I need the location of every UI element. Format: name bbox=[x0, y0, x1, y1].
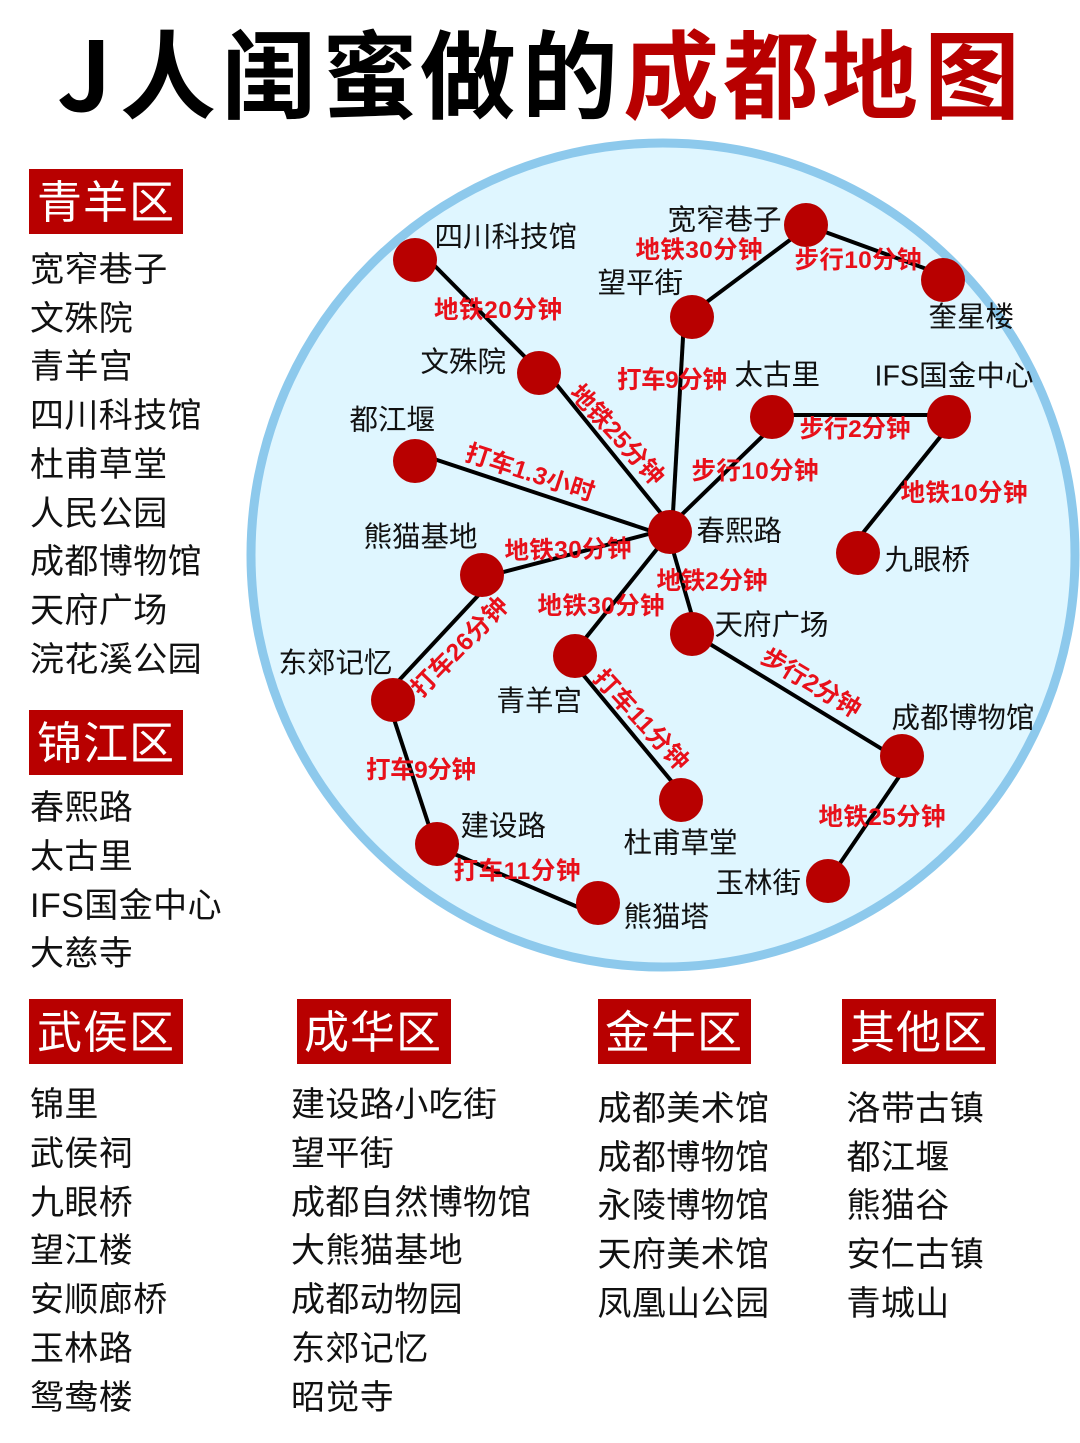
title: 成都地图 bbox=[623, 0, 1020, 139]
panel: 武侯区 list: 武侯祠 bbox=[30, 1135, 133, 1173]
panel: route map bbox=[251, 143, 1075, 967]
panel: 青羊区 list: 文殊院 bbox=[30, 300, 133, 338]
stop name labels: 熊猫塔 bbox=[624, 902, 709, 934]
stop name labels: 成都博物馆 bbox=[892, 703, 1034, 735]
travel time labels: 步行10分钟 bbox=[794, 246, 922, 274]
panel: 成华区 list: 昭觉寺 bbox=[291, 1379, 394, 1417]
panel: 武侯区 list: 九眼桥 bbox=[30, 1184, 133, 1222]
panel: 锦江区 list: 太古里 bbox=[30, 838, 133, 876]
stop name labels: 春熙路 bbox=[696, 516, 782, 548]
travel time labels: 打车26分钟 bbox=[406, 592, 514, 702]
stop name labels: 熊猫基地 bbox=[364, 522, 478, 554]
stop name labels: IFS国金中心 bbox=[874, 361, 1034, 393]
panel: 锦江区 list: 春熙路 bbox=[30, 789, 133, 827]
travel time labels: 打车11分钟 bbox=[454, 857, 580, 885]
panel: 其他区 list: 都江堰 bbox=[846, 1139, 950, 1177]
panel: 金牛区 list: 天府美术馆 bbox=[598, 1236, 770, 1274]
travel time labels: 打车9分钟 bbox=[366, 756, 476, 784]
panel: 锦江区 list: 锦江区 bbox=[37, 718, 175, 769]
stop name labels: 都江堰 bbox=[350, 405, 435, 437]
panel: 青羊区 list: 成都博物馆 bbox=[30, 543, 202, 581]
travel time labels: 地铁10分钟 bbox=[900, 479, 1028, 507]
panel: 青羊区 list: 浣花溪公园 bbox=[30, 641, 202, 679]
travel time labels bbox=[366, 236, 1028, 885]
stop name labels: 九眼桥 bbox=[884, 545, 970, 577]
panel: 武侯区 list: 鸳鸯楼 bbox=[30, 1379, 133, 1417]
panel: 金牛区 list: 成都美术馆 bbox=[598, 1090, 770, 1128]
panel: 青羊区 list: 天府广场 bbox=[30, 592, 168, 630]
stop name labels: 文殊院 bbox=[420, 347, 506, 379]
travel time labels: 步行10分钟 bbox=[692, 457, 818, 485]
panel: 锦江区 list: 大慈寺 bbox=[30, 935, 133, 973]
travel time labels: 地铁25分钟 bbox=[818, 803, 946, 831]
panel: 成华区 list: 成都动物园 bbox=[291, 1281, 463, 1319]
travel time labels: 打车1.3小时 bbox=[462, 439, 598, 507]
stop name labels bbox=[278, 205, 1034, 934]
panel: 其他区 list: 洛带古镇 bbox=[846, 1090, 984, 1128]
travel time labels: 地铁25分钟 bbox=[564, 379, 670, 491]
travel time labels: 打车9分钟 bbox=[617, 366, 727, 394]
panel: 金牛区 list: 永陵博物馆 bbox=[598, 1187, 770, 1225]
panel: 青羊区 list: 人民公园 bbox=[30, 495, 168, 533]
travel time labels: 地铁20分钟 bbox=[434, 296, 562, 324]
stop name labels: 奎星楼 bbox=[928, 302, 1014, 334]
panel: 青羊区 list: 杜甫草堂 bbox=[30, 446, 168, 484]
panel: 武侯区 list: 锦里 bbox=[30, 1086, 99, 1124]
panel: 锦江区 list: IFS国金中心 bbox=[30, 887, 222, 925]
panel: 青羊区 list: 四川科技馆 bbox=[30, 397, 202, 435]
panel: 青羊区 list: 青羊区 bbox=[37, 177, 175, 228]
travel time labels: 地铁30分钟 bbox=[504, 535, 632, 565]
travel time labels: 步行2分钟 bbox=[756, 642, 866, 724]
stop name labels: 青羊宫 bbox=[496, 686, 582, 718]
panel: 金牛区 list: 金牛区 bbox=[605, 1007, 743, 1058]
travel time labels: 地铁30分钟 bbox=[636, 236, 762, 264]
panel: 武侯区 list: 望江楼 bbox=[30, 1232, 133, 1270]
panel: 其他区 list bbox=[842, 999, 996, 1323]
panel: 成华区 list: 望平街 bbox=[291, 1135, 394, 1173]
panel: 锦江区 list bbox=[29, 710, 222, 973]
panel: 武侯区 list: 玉林路 bbox=[30, 1330, 133, 1368]
travel time labels: 步行2分钟 bbox=[800, 415, 910, 443]
panel: 成华区 list: 建设路小吃街 bbox=[291, 1086, 497, 1124]
stop name labels: 东郊记忆 bbox=[278, 648, 393, 680]
panel: 成华区 list: 东郊记忆 bbox=[291, 1330, 429, 1368]
panel: 武侯区 list: 安顺廊桥 bbox=[30, 1281, 168, 1319]
stop name labels: 建设路 bbox=[460, 811, 546, 843]
title bbox=[57, 0, 1020, 139]
panel: 青羊区 list bbox=[29, 169, 202, 679]
panel: 其他区 list: 安仁古镇 bbox=[846, 1236, 984, 1274]
panel: 青羊区 list: 青羊宫 bbox=[30, 348, 133, 386]
panel: 金牛区 list bbox=[598, 999, 770, 1323]
panel: 成华区 list: 大熊猫基地 bbox=[291, 1232, 463, 1270]
stop name labels: 天府广场 bbox=[714, 610, 829, 642]
stop name labels: 四川科技馆 bbox=[434, 222, 577, 254]
panel: 金牛区 list: 成都博物馆 bbox=[598, 1139, 770, 1177]
panel: 其他区 list: 其他区 bbox=[850, 1007, 988, 1058]
stop name labels: 玉林街 bbox=[716, 868, 801, 900]
panel: 成华区 list: 成华区 bbox=[304, 1007, 442, 1058]
panel: 金牛区 list: 凤凰山公园 bbox=[598, 1285, 770, 1323]
panel: 其他区 list: 熊猫谷 bbox=[846, 1187, 950, 1225]
stop name labels: 杜甫草堂 bbox=[624, 828, 738, 860]
panel: 武侯区 list: 武侯区 bbox=[37, 1007, 175, 1058]
travel time labels: 打车11分钟 bbox=[587, 664, 695, 776]
panel: 成华区 list bbox=[291, 999, 532, 1417]
panel: 青羊区 list: 宽窄巷子 bbox=[30, 251, 168, 289]
panel: 武侯区 list bbox=[29, 999, 183, 1417]
panel: 成华区 list: 成都自然博物馆 bbox=[291, 1184, 532, 1222]
title: J人闺蜜做的 bbox=[57, 0, 618, 139]
stop name labels: 太古里 bbox=[734, 360, 820, 392]
stop name labels: 宽窄巷子 bbox=[668, 205, 782, 237]
panel: 其他区 list: 青城山 bbox=[846, 1285, 950, 1323]
travel time labels: 地铁30分钟 bbox=[538, 592, 664, 620]
travel time labels: 地铁2分钟 bbox=[656, 567, 768, 595]
stop name labels: 望平街 bbox=[598, 268, 683, 300]
